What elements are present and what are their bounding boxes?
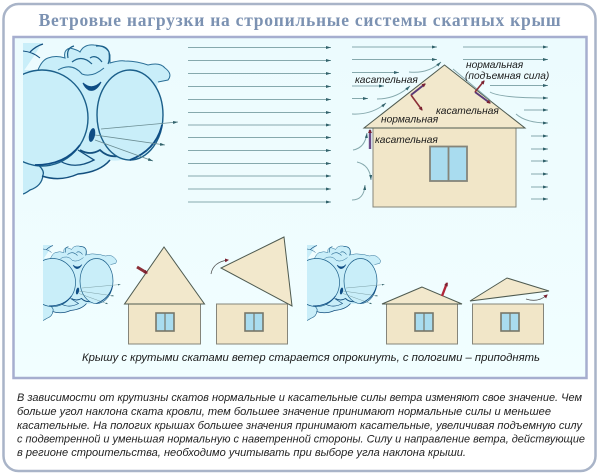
explanatory text <box>17 392 585 459</box>
large house with wind forces <box>352 47 549 207</box>
illustration: small cloud, gentle roof <box>294 245 384 320</box>
explanatory text: с подветренной и уменьшая нормальную с наветренной стороны. Силу и направление ветра, действующие <box>17 434 585 446</box>
rotation arrow <box>211 260 228 274</box>
diagram panel <box>0 37 586 378</box>
force arrows on roof and wall <box>370 81 490 149</box>
force labels: (подъемная сила) <box>465 71 549 82</box>
illustration: small cloud, steep roof <box>30 245 120 320</box>
explanatory text: касательные. На пологих крышах большее значения принимают касательные, увеличивая подъемную силу <box>17 420 583 432</box>
gentle roof house <box>382 283 462 344</box>
house roof <box>364 65 525 128</box>
lift force arrow <box>442 283 447 296</box>
force labels <box>355 60 549 146</box>
force labels: нормальная <box>381 114 439 126</box>
house with lifted gentle roof <box>470 278 549 344</box>
explanatory text: в регионе строительства, необходимо учитывать при выборе угла наклона крыши. <box>17 447 466 459</box>
title: Ветровые нагрузки на стропильные системы скатных крыш <box>39 10 561 30</box>
explanatory text: В зависимости от крутизны скатов нормальные и касательные силы ветра изменяют свое значение. Чем <box>17 392 582 404</box>
force labels: касательная <box>355 75 418 86</box>
house body <box>373 128 516 207</box>
wind force arrow <box>137 267 147 273</box>
house window <box>430 146 467 181</box>
house with overturned steep roof <box>211 237 292 344</box>
diagram caption: Крышу с крутыми скатами ветер старается опрокинуть, с пологими – приподнять <box>82 352 540 364</box>
explanatory text: больше угол наклона ската кровли, тем большее значение принимают нормальные силы и меньшее <box>17 406 551 418</box>
wind flow around the house <box>352 47 548 200</box>
wind flow lines <box>188 48 331 202</box>
rotation arrow <box>526 295 547 300</box>
illustration: large wind cloud <box>0 43 178 194</box>
force labels: касательная <box>375 135 438 146</box>
force labels: касательная <box>436 106 499 117</box>
force labels: нормальная <box>466 60 524 71</box>
steep roof house <box>124 247 204 344</box>
